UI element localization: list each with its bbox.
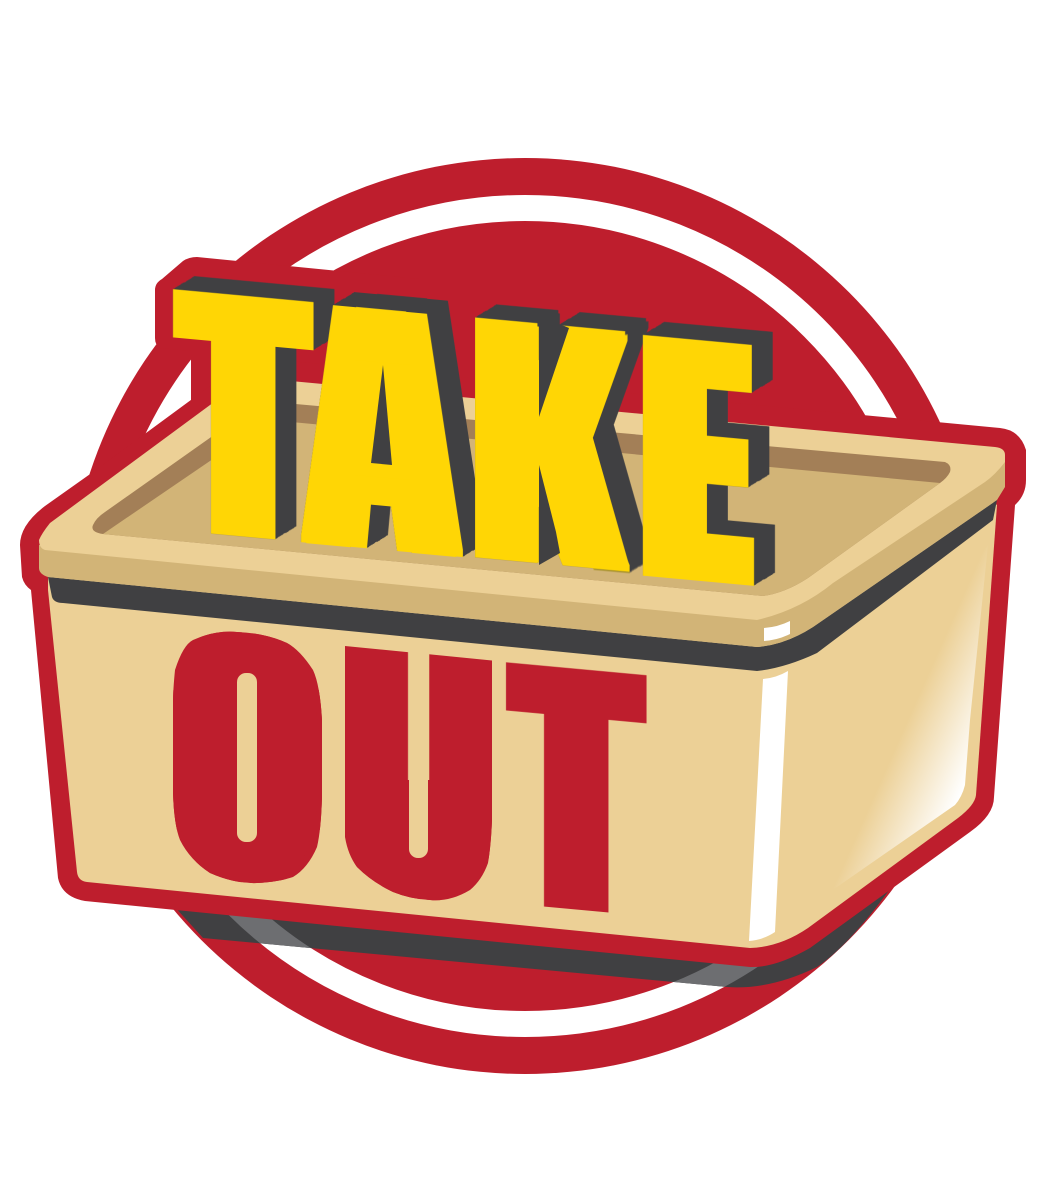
letter O: O <box>186 556 306 958</box>
word: OUT <box>173 632 647 912</box>
letter T: T <box>191 226 295 607</box>
takeout box <box>39 377 1005 948</box>
lid front edge <box>39 455 1005 647</box>
box body <box>48 500 997 948</box>
lid top rim <box>39 377 1005 620</box>
letter A: A <box>309 233 453 626</box>
red outline around title <box>155 257 420 420</box>
letter O <box>173 632 322 884</box>
letter U <box>345 646 492 900</box>
tray inner wall <box>92 401 950 596</box>
long white highlight <box>749 671 788 941</box>
badge: red circle with white ring <box>67 158 983 1074</box>
letter T: T <box>524 599 628 981</box>
red outline around box <box>20 358 1026 967</box>
letter U: U <box>349 570 488 972</box>
word: TAKE <box>191 226 735 650</box>
letter E: E <box>659 269 735 650</box>
small white highlight <box>764 621 790 641</box>
body shine gradient <box>790 545 988 915</box>
letter K: K <box>481 247 614 639</box>
lid dark underside band <box>48 500 997 671</box>
box drop shadow <box>178 891 888 988</box>
tray floor <box>103 420 940 596</box>
